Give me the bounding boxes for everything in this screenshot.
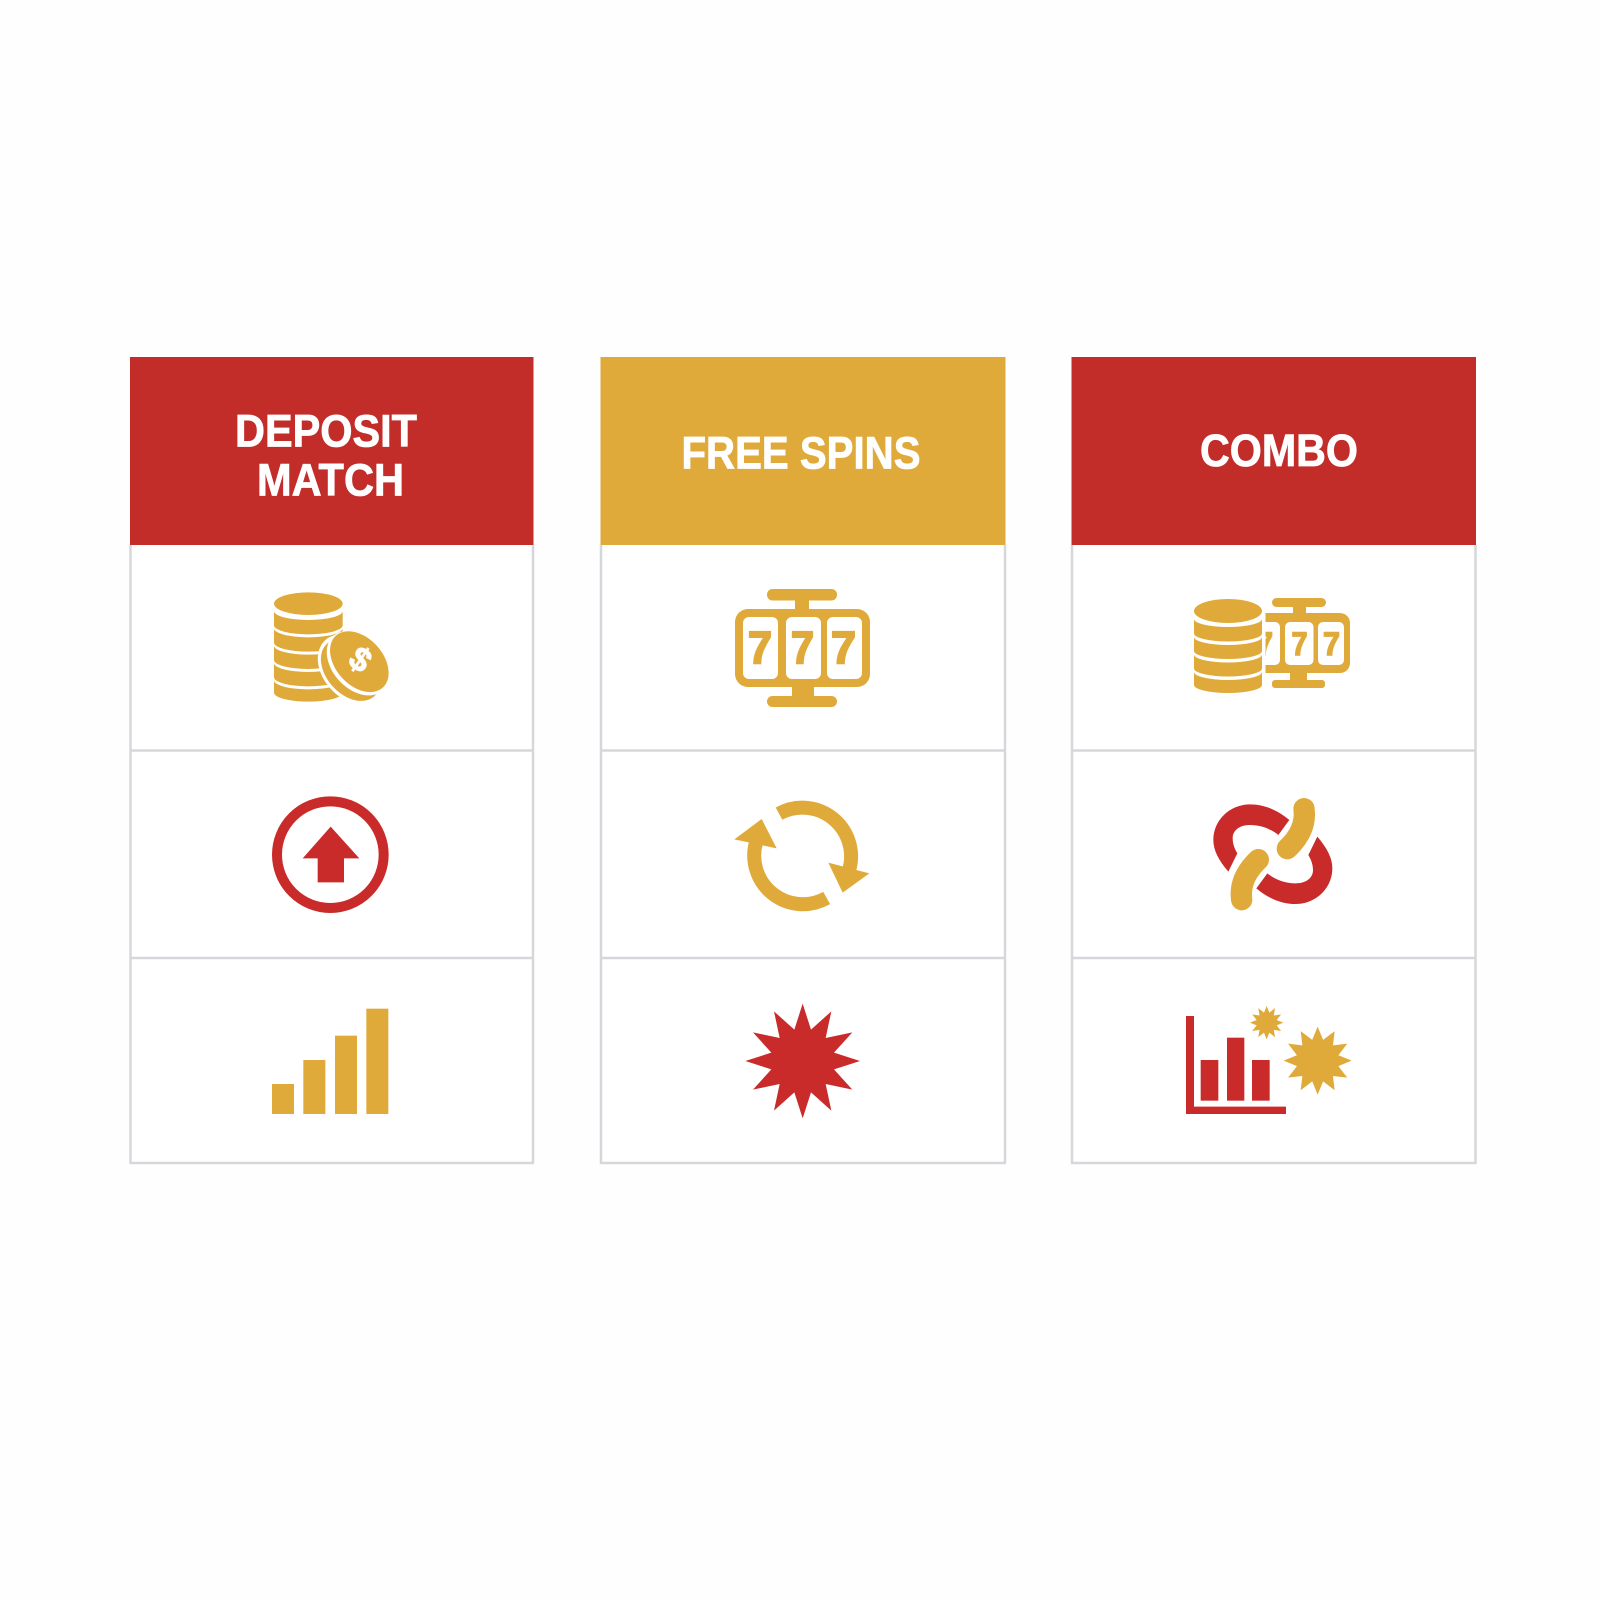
panel: combo [1072,357,1476,1163]
cell frame [130,545,533,1163]
coin stack [1194,599,1262,693]
icon: coin stack and slot machine [1194,595,1350,695]
icon: slot machine 777: 7 [748,622,772,673]
small slot machine: 7 [1257,626,1273,662]
header: deposit match: DEPOSIT [235,406,417,456]
icon: slot machine 777: 7 [791,622,814,673]
icon: rising bars [272,1009,388,1114]
icon: circular refresh arrows [734,808,869,904]
icon: slot machine 777: 7 [831,622,856,673]
small slot machine [1240,595,1350,695]
header: free spins [600,357,1006,545]
header: combo: COMBO [1200,425,1358,476]
icon: coin stack with dollar coin [274,592,401,718]
header: combo [1072,357,1476,545]
panel: free spins [600,357,1006,1163]
cell frame [601,545,1005,1163]
icon: slot machine 777 [735,589,870,707]
icon: red starburst [745,1004,860,1118]
small slot machine: 7 [1292,626,1308,662]
header: free spins: FREE SPINS [682,428,920,478]
icon: arrow up in circle [277,801,384,908]
small slot machine: 7 [1323,626,1340,662]
icon: bar chart with starbursts [1186,1006,1352,1114]
icon: interlocked chain [1213,804,1332,904]
header: deposit match: MATCH [257,454,404,506]
header: deposit match [130,357,534,545]
panel: deposit match [130,357,534,1163]
cell frame [1072,545,1476,1163]
icon: coin stack with dollar coin: $ [342,640,379,681]
